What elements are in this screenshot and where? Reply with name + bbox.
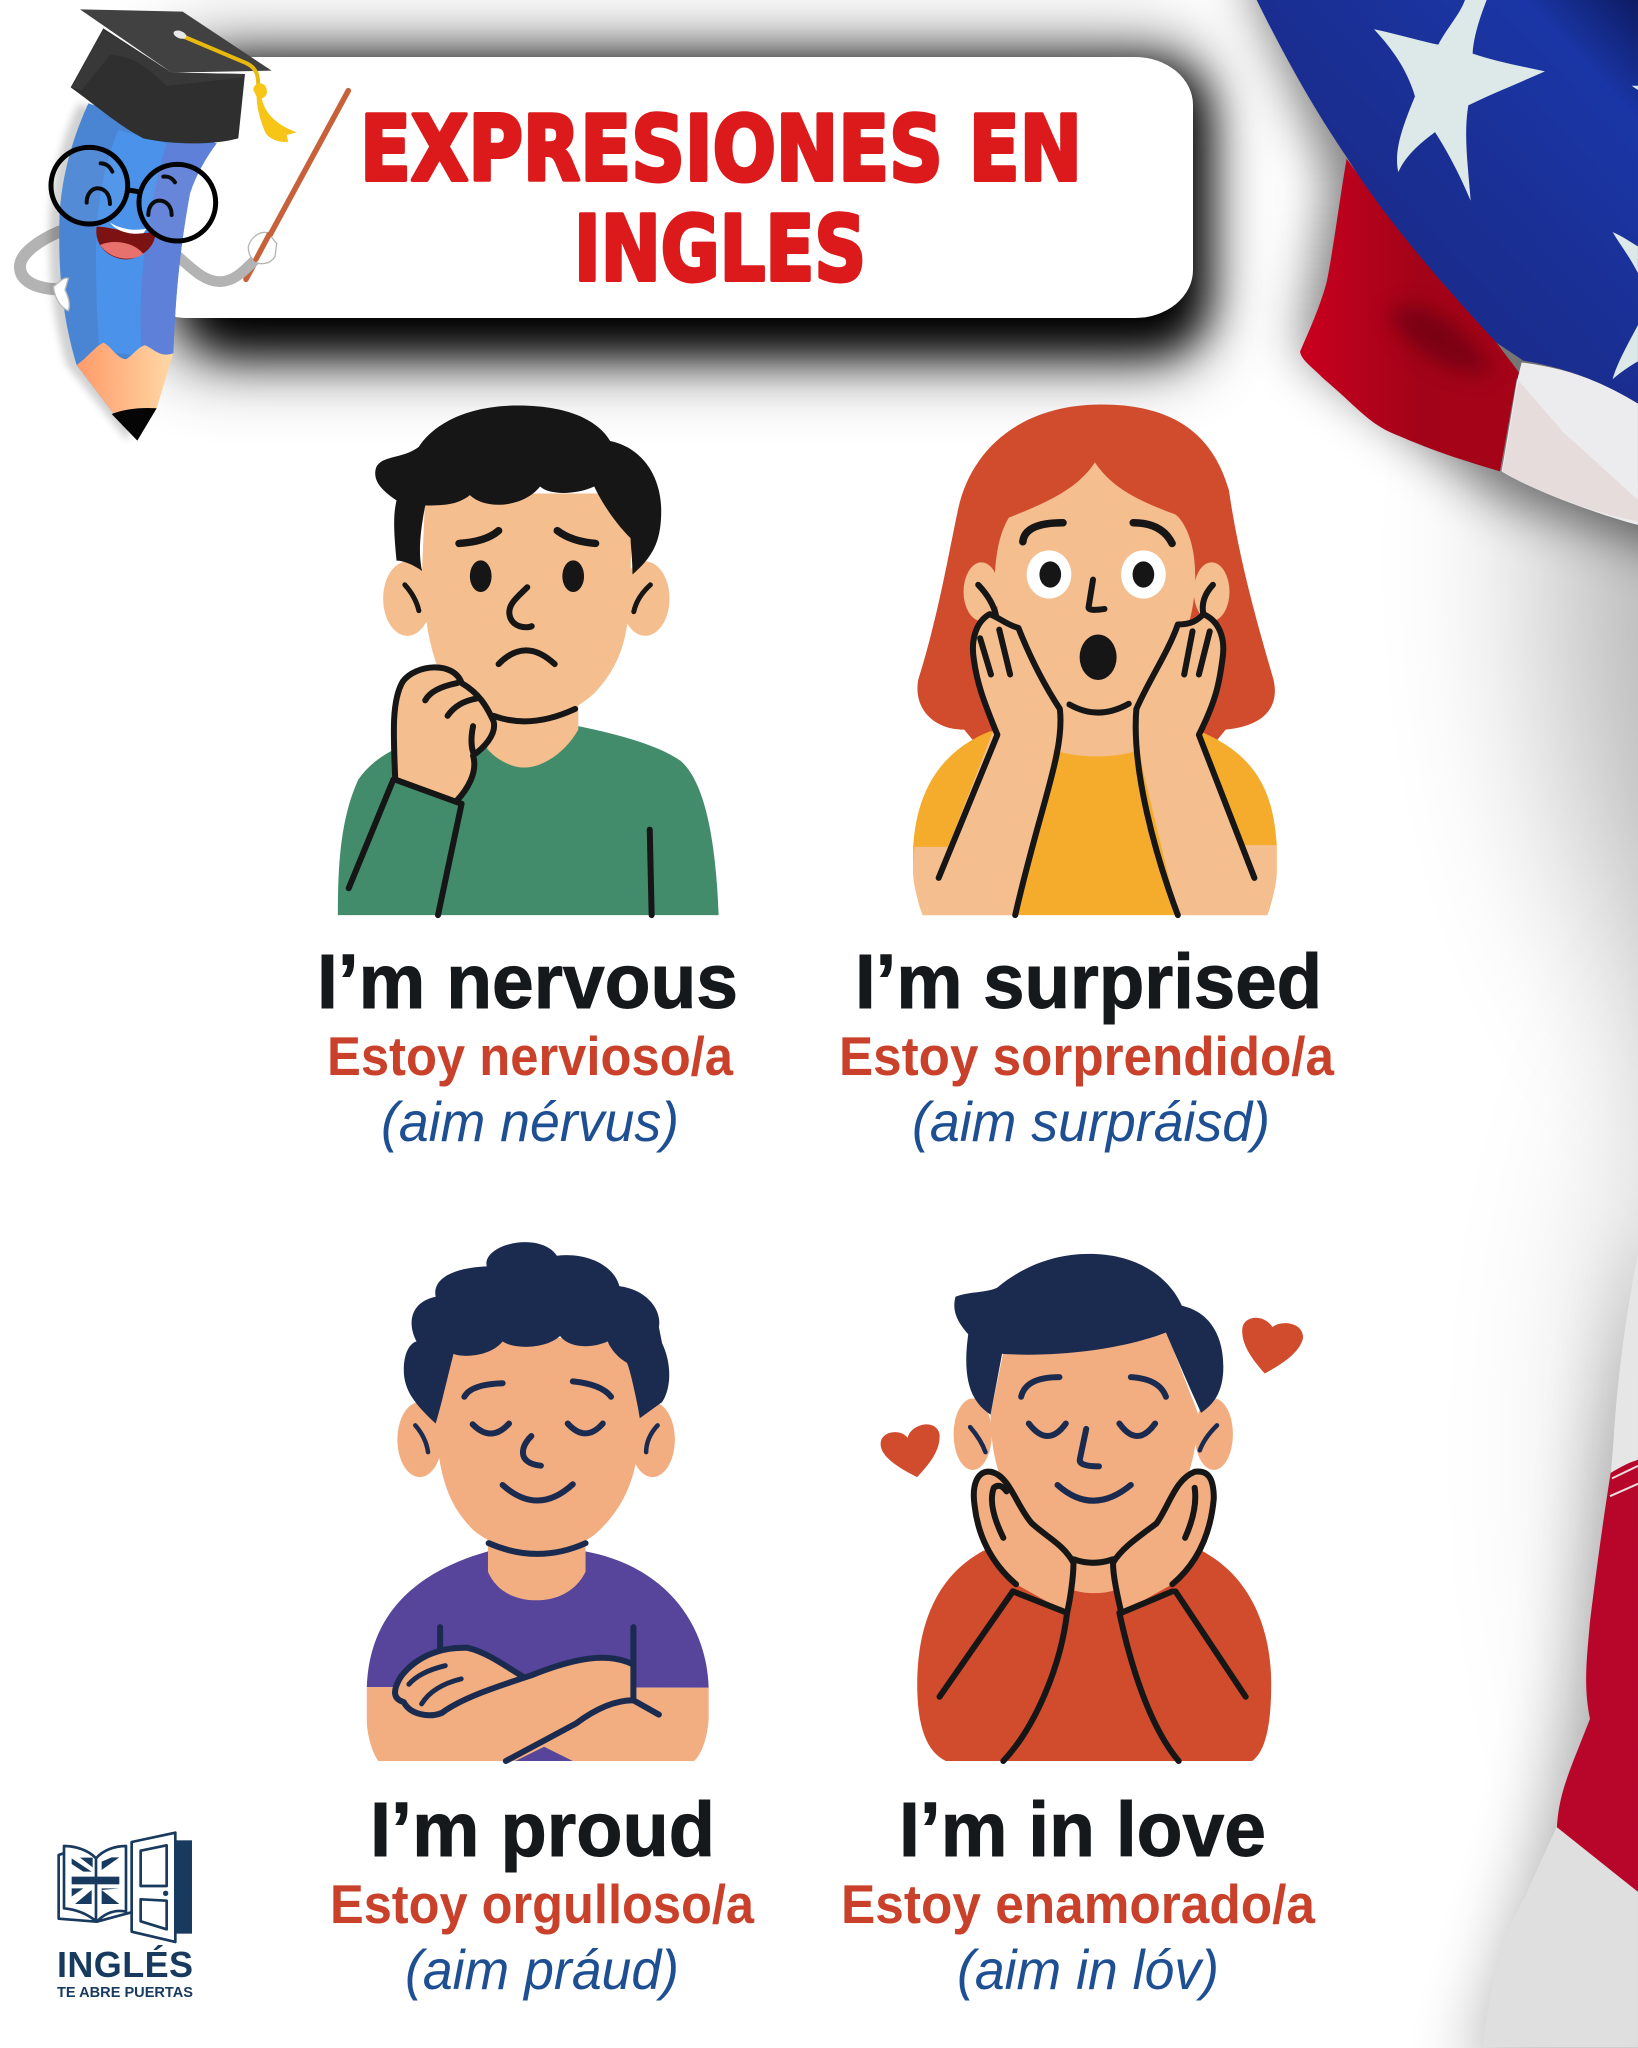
right arm [178, 257, 253, 282]
flag red stripe [1300, 159, 1532, 471]
background shadows [1240, 0, 1638, 2048]
text: I'm nervous [317, 939, 738, 1153]
text: I'm proud: I’m proud [370, 1787, 715, 1873]
shirt [338, 726, 719, 915]
hand and sleeve lines [940, 1471, 1246, 1761]
tassel [253, 83, 297, 142]
pencil lead [112, 408, 157, 441]
character: proud boy [367, 1242, 709, 1761]
ears [383, 561, 670, 636]
hand and sleeve lines [349, 667, 652, 915]
logo text: INGLÉS [57, 1944, 193, 1985]
banner shadow [150, 40, 1210, 370]
ears [397, 1402, 675, 1477]
text: I'm proud [330, 1787, 754, 2001]
title banner [130, 57, 1193, 318]
pencil body [59, 103, 217, 413]
glasses [51, 147, 216, 241]
flag red fold [1387, 306, 1493, 373]
flag blue canton [1257, 0, 1638, 404]
shirt [367, 1551, 709, 1688]
face [1023, 523, 1172, 713]
character: surprised girl [913, 404, 1277, 915]
stick over hand [256, 234, 269, 259]
pencil middle strip [96, 130, 167, 357]
title: INGLES [574, 197, 866, 302]
heart left [881, 1424, 940, 1477]
flag bottom right [1483, 1254, 1638, 2048]
neck [1067, 1549, 1121, 1593]
flag white lower piece [1483, 1827, 1638, 2048]
mouth [96, 227, 155, 259]
crossed forearm fill [394, 1648, 633, 1700]
flag top right [1257, 0, 1638, 525]
logo icon: book and door [59, 1833, 192, 1942]
neck [1053, 700, 1140, 756]
hand holding stick [248, 232, 277, 264]
hair [375, 406, 661, 574]
logo tagline: TE ABRE PUERTAS [57, 1984, 193, 2001]
neck [488, 1538, 586, 1600]
crossed arm lines [395, 1627, 659, 1761]
flag star [1374, 0, 1545, 201]
head [995, 462, 1195, 716]
pencil mascot [20, 9, 348, 441]
hair [917, 404, 1275, 745]
text: I'm nervous: I’m nervous [317, 939, 738, 1025]
text: I'm proud: (aim práud) [405, 1938, 679, 2001]
text: I'm in love: (aim in lóv) [957, 1938, 1219, 2001]
face [970, 1377, 1217, 1501]
ears [954, 1399, 1233, 1470]
forearms [913, 714, 1277, 915]
teeth [110, 223, 147, 234]
pencil wood [77, 343, 173, 441]
flag pink shade [1503, 380, 1638, 521]
pencil body shadow [49, 103, 207, 441]
tongue [100, 242, 143, 259]
cap highlight [72, 30, 243, 90]
flag red stitching [1610, 1466, 1638, 1496]
text: I'm surprised: (aim surpráisd) [912, 1090, 1270, 1153]
eyes [87, 163, 175, 215]
shirt triangle [515, 1747, 573, 1761]
title: EXPRESIONES EN [360, 97, 1082, 202]
title [360, 97, 1082, 302]
shirt [913, 731, 1277, 915]
character: nervous boy [338, 406, 719, 915]
tassel cord [180, 35, 258, 87]
text: I'm in love: Estoy enamorado/a [841, 1873, 1315, 1935]
face [415, 1381, 658, 1554]
head [422, 493, 633, 723]
arms [367, 1687, 709, 1761]
hair [404, 1242, 669, 1424]
pencil right strip [141, 143, 217, 357]
left arm [20, 232, 59, 289]
text: I'm surprised: I’m surprised [855, 939, 1322, 1025]
text: I'm proud: Estoy orgulloso/a [330, 1873, 754, 1935]
text: I'm nervous: (aim nérvus) [381, 1090, 679, 1153]
pointer stick [246, 91, 348, 279]
head [991, 1331, 1198, 1556]
hair [954, 1254, 1223, 1415]
sweater [917, 1550, 1271, 1761]
cap button [172, 29, 187, 40]
neck [487, 700, 578, 768]
text: I'm nervous: Estoy nervioso/a [327, 1025, 733, 1087]
flag white upper piece [1611, 1254, 1638, 1476]
text: I'm surprised [839, 939, 1334, 1153]
head [436, 1338, 640, 1554]
text: I'm in love: I’m in love [899, 1787, 1266, 1873]
flag star partial [1613, 86, 1638, 379]
text: I'm surprised: Estoy sorprendido/a [839, 1025, 1334, 1087]
logo [57, 1833, 193, 2001]
face [405, 531, 650, 721]
character: in love boy [881, 1254, 1303, 1761]
ears [964, 562, 1230, 621]
flag red piece [1557, 1459, 1638, 1892]
hand on hip [53, 278, 69, 311]
text: I'm in love [841, 1787, 1315, 2001]
hand [394, 667, 494, 800]
hand and arm lines [939, 585, 1254, 915]
heart right [1242, 1318, 1303, 1374]
cap base [71, 28, 245, 143]
flag white stripe [1502, 362, 1638, 525]
cap board [80, 9, 272, 73]
hands [973, 614, 1223, 735]
hands [974, 1471, 1214, 1613]
